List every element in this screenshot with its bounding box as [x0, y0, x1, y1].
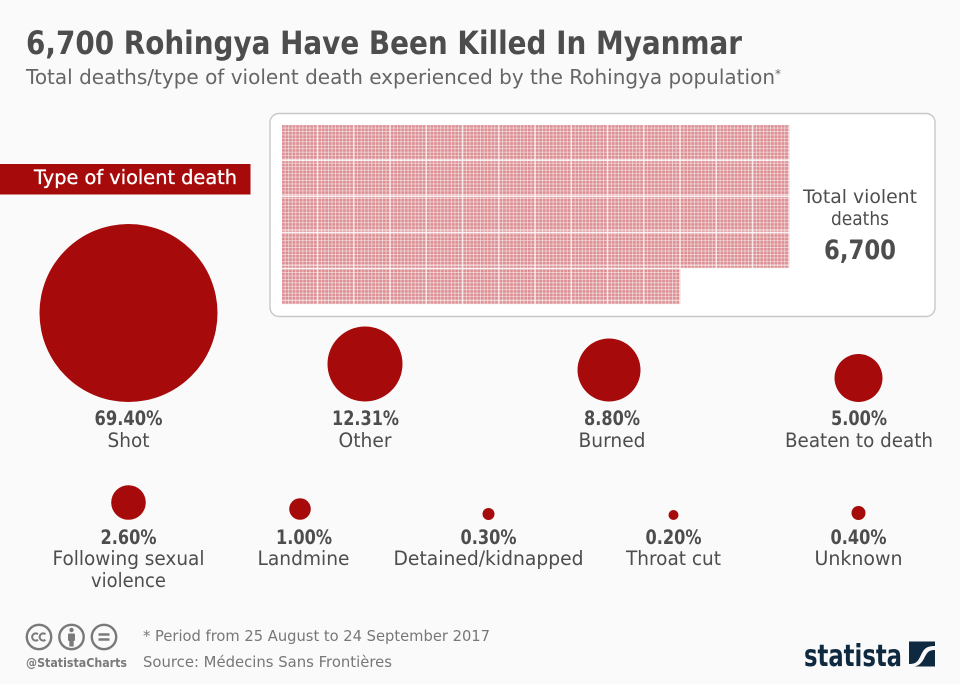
item: other: 12.31% [332, 407, 399, 430]
item: shot: 69.40% [94, 407, 162, 430]
item: detained/kidnapped: Detained/kidnapped [394, 547, 584, 570]
total label: Total violent [802, 186, 917, 208]
subtitle: Total deaths/type of violent death experienced by the Rohingya population [25, 65, 775, 89]
item: unknown [814, 506, 902, 570]
heading: type of violent death [0, 164, 250, 194]
icon: statista mark [909, 642, 935, 667]
item: burned: 8.80% [584, 407, 640, 430]
item: landmine [258, 498, 350, 570]
item: burned [578, 338, 646, 452]
item: other: Other [338, 429, 392, 452]
item: beaten to death: 5.00% [831, 407, 887, 430]
icon: creative commons licence [27, 625, 116, 649]
item: throat cut: Throat cut [625, 547, 721, 570]
item: throat cut [625, 510, 721, 570]
item: following sexual violence [52, 485, 204, 592]
statista logo: statista [804, 639, 902, 674]
total label: deaths [831, 208, 889, 230]
total label [802, 186, 917, 266]
item: landmine: 1.00% [276, 526, 332, 549]
waffle chart of 6,700 deaths [282, 125, 791, 306]
total label: 6,700 [824, 235, 896, 266]
heading: type of violent death: Type of violent death [33, 166, 237, 189]
item: beaten to death: Beaten to death [785, 429, 933, 452]
item: burned: Burned [578, 429, 646, 452]
item: beaten to death [785, 354, 933, 452]
item: shot: Shot [108, 429, 150, 452]
title: 6,700 Rohingya Have Been Killed In Myanmar [26, 24, 742, 62]
item: shot [40, 224, 218, 452]
item: following sexual violence: 2.60% [100, 526, 156, 549]
footnote: * Period from 25 August to 24 September 2017 [143, 627, 490, 645]
item: detained/kidnapped: 0.30% [460, 526, 516, 549]
item: following sexual violence: violence [91, 569, 166, 592]
item: throat cut: 0.20% [646, 526, 702, 549]
item: detained/kidnapped [394, 508, 584, 570]
item: following sexual violence: Following sexual [52, 547, 204, 570]
subtitle: * [775, 67, 781, 81]
source: Source: Médecins Sans Frontières [143, 653, 392, 671]
item: unknown: Unknown [814, 547, 902, 570]
item: landmine: Landmine [258, 547, 350, 570]
item: other [328, 326, 402, 452]
panel: total violent deaths [270, 114, 935, 316]
credit: statista charts: @StatistaCharts [26, 656, 127, 670]
item: unknown: 0.40% [830, 526, 886, 549]
